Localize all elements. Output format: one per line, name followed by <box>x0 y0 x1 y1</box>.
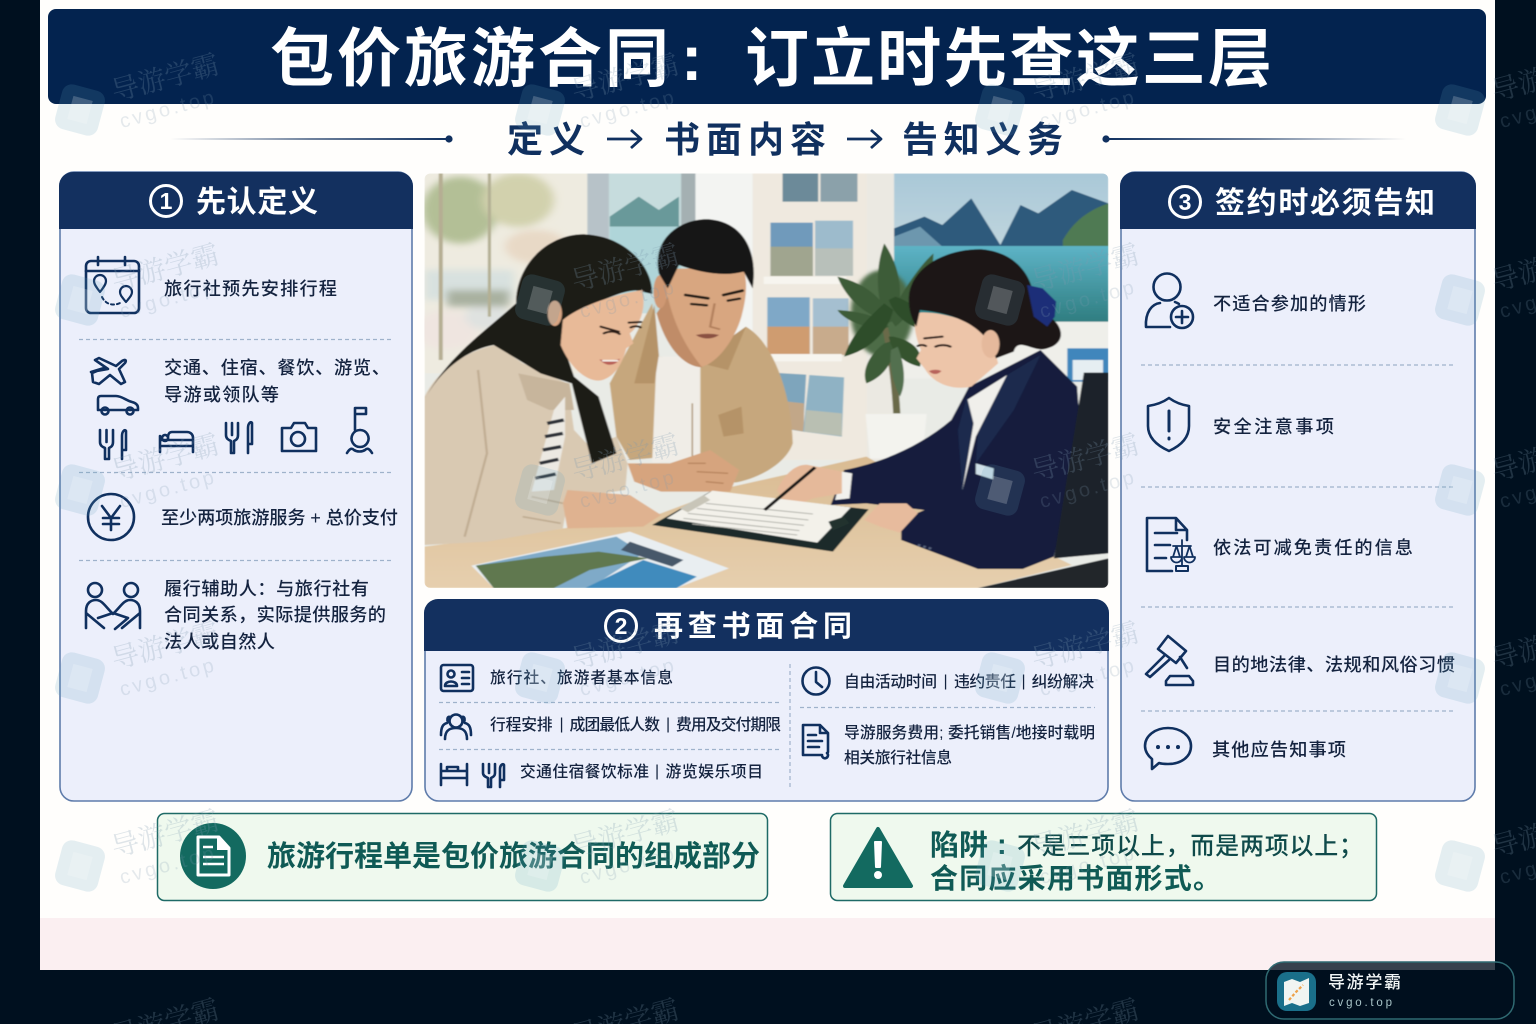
text: fulfilment assistant definition: 合同关系，实际提供服务的 <box>164 605 386 625</box>
clipboard <box>652 492 869 552</box>
text: free time, liability, disputes: 纠纷解决 <box>1032 673 1094 691</box>
watermark pattern: 导游学霸 <box>568 48 682 107</box>
icon: id card <box>441 665 473 691</box>
text: guide fees and commissioned sales: 相关旅行社信息 <box>844 748 952 767</box>
panel: 2 written contract <box>424 599 1109 801</box>
street outside <box>424 173 587 373</box>
watermark pattern: 导游学霸 <box>568 428 682 487</box>
potted plant <box>837 243 933 413</box>
man: hands <box>628 450 739 492</box>
watermark pattern: 导游学霸 <box>568 804 682 863</box>
watermark pattern: cvgo.top <box>1037 86 1139 133</box>
icon: speech bubble <box>1145 728 1191 769</box>
text: itinerary, minimum group size, fees: 成团最低人数 <box>570 716 660 734</box>
text: liability exemption information: 依法可减免责任的信息 <box>1213 538 1413 558</box>
text: free time, liability, disputes: 违约责任 <box>954 673 1016 691</box>
watermark pattern: cvgo.top <box>577 654 679 701</box>
watermark pattern: cvgo.top <box>117 276 219 323</box>
icon: person with plus <box>1146 274 1193 328</box>
watermark pattern: 导游学霸 <box>108 616 222 675</box>
brand badge: cvgo.top <box>1329 997 1392 1009</box>
watermark pattern: cvgo.top <box>1037 466 1139 513</box>
icon: fork and knife 2 <box>226 422 252 453</box>
icon: fork and knife <box>100 430 126 459</box>
heading: 3: 签约时必须告知 <box>1215 187 1435 220</box>
heading: 2: 再查书面合同 <box>654 610 852 643</box>
watermark pattern: cvgo.top <box>577 86 679 133</box>
text: itinerary, minimum group size, fees: | <box>560 716 564 733</box>
title banner: 订立时先查这三层 <box>745 23 1272 95</box>
icon: camera <box>282 423 316 451</box>
table <box>424 457 1072 588</box>
woman: jacket <box>424 345 628 545</box>
woman: hair <box>424 234 652 463</box>
text: free time, liability, disputes: | <box>944 673 948 690</box>
text: fulfilment assistant definition: 法人或自然人 <box>164 631 275 652</box>
watermark pattern: cvgo.top <box>577 276 679 323</box>
watermark pattern: 导游学霸 <box>108 804 222 863</box>
icon: clock <box>802 668 830 694</box>
callout: itinerary is part of contract: 旅游行程单是包价旅游合同的组成部分 <box>267 840 760 873</box>
watermark pattern: cvgo.top <box>117 466 219 513</box>
watermark pattern: 导游学霸 <box>568 238 682 297</box>
watermark pattern: 导游学霸 <box>108 48 222 107</box>
watermark pattern: cvgo.top <box>577 466 679 513</box>
subtitle flow <box>170 119 1406 160</box>
icon: document badge <box>180 823 246 889</box>
clerk: jacket <box>831 350 1081 569</box>
mural right <box>894 174 1108 245</box>
panel: 3 mandatory disclosures <box>1120 172 1476 801</box>
clerk: face <box>915 313 998 388</box>
watermark pattern: 导游学霸 <box>1028 616 1142 675</box>
icon: gavel <box>1146 636 1193 685</box>
woman: hand <box>563 490 661 528</box>
text: guide fees and commissioned sales: 导游服务费用; 委托销售/地接时载明 <box>844 724 1095 742</box>
icon: fork and knife small <box>483 764 504 787</box>
text: arranged itinerary: 旅行社预先安排行程 <box>164 279 337 299</box>
text: itinerary, minimum group size, fees: 行程安排 <box>490 716 553 734</box>
subtitle flow: 定义 <box>507 119 585 160</box>
text: fulfilment assistant definition: 履行辅助人：与旅行社有 <box>164 579 369 599</box>
icon: bed <box>160 432 193 452</box>
text: service types: 交通、住宿、餐饮、游览、 <box>164 358 390 378</box>
icon: car <box>98 396 138 414</box>
icon: warning triangle <box>845 829 911 886</box>
text: two services plus total price: 至少两项旅游服务 + 总价支付 <box>161 508 398 528</box>
brand badge <box>1266 962 1514 1019</box>
text: itinerary, minimum group size, fees <box>490 715 781 734</box>
woman: face <box>561 290 644 381</box>
brochure rack <box>752 174 754 332</box>
icon: shield <box>1148 398 1189 451</box>
watermark pattern: 导游学霸 <box>1028 804 1142 863</box>
text: standards and entertainment: 交通住宿餐饮标准 <box>520 762 649 781</box>
text: standards and entertainment: 游览娱乐项目 <box>666 763 763 781</box>
watermark pattern: cvgo.top <box>1037 842 1139 889</box>
magazine <box>471 532 729 588</box>
heading: 1: 1 <box>160 188 173 214</box>
watermark pattern: cvgo.top <box>1037 654 1139 701</box>
callout: trap warning: : <box>997 829 1007 861</box>
icon: bed small <box>441 764 467 785</box>
text: other matters: 其他应告知事项 <box>1212 739 1346 760</box>
watermark pattern: 导游学霸 <box>568 616 682 675</box>
watermark pattern: 导游学霸 <box>108 428 222 487</box>
title banner: : <box>681 22 702 94</box>
watermark pattern: 导游学霸 <box>108 238 222 297</box>
text: service types: 导游或领队等 <box>164 385 279 405</box>
text: itinerary, minimum group size, fees: | <box>666 716 670 733</box>
text: fulfilment assistant definition <box>164 579 386 652</box>
text: free time, liability, disputes <box>844 673 1094 691</box>
watermark pattern: cvgo.top <box>1037 276 1139 323</box>
watermark pattern: cvgo.top <box>117 842 219 889</box>
heading: 1: 先认定义 <box>196 186 318 219</box>
icon: guide with flag <box>347 408 372 453</box>
text: itinerary, minimum group size, fees: 费用及交付期限 <box>676 715 781 734</box>
watermark pattern: 导游学霸 <box>1028 238 1142 297</box>
watermark pattern: cvgo.top <box>117 86 219 133</box>
subtitle flow: 告知义务 <box>902 119 1063 160</box>
callout: trap warning: 合同应采用书面形式。 <box>930 863 1221 894</box>
text: standards and entertainment <box>520 762 763 781</box>
wall <box>695 173 753 340</box>
title banner: 包价旅游合同 <box>270 23 669 95</box>
text: service types <box>164 358 390 405</box>
callout: itinerary is part of contract <box>158 814 768 900</box>
man: face <box>663 269 746 367</box>
heading: 2: 2 <box>615 613 627 639</box>
text: safety notes: 安全注意事项 <box>1213 416 1334 437</box>
icon: fulfilment assistants handshake <box>86 583 140 629</box>
icon: document small <box>803 725 828 758</box>
text: free time, liability, disputes: 自由活动时间 <box>844 673 937 691</box>
text: destination laws and customs: 目的地法律、法规和风俗习惯 <box>1213 655 1455 675</box>
text: unsuitable conditions: 不适合参加的情形 <box>1213 294 1366 314</box>
callout: trap warning: 陷阱 <box>930 829 988 862</box>
man: shirt <box>610 303 793 483</box>
watermark pattern: 导游学霸 <box>1028 428 1142 487</box>
icon: plane <box>91 358 126 384</box>
icon: itinerary calendar <box>86 257 139 313</box>
heading: 3: 3 <box>1179 189 1191 215</box>
icon: brand map logo <box>1277 972 1316 1011</box>
watermark pattern: cvgo.top <box>117 654 219 701</box>
monitor and keyboard <box>1054 373 1108 558</box>
text: guide fees and commissioned sales <box>844 724 1095 767</box>
photo: couple signing with travel agent <box>424 173 1108 588</box>
watermark pattern: 导游学霸 <box>1028 48 1142 107</box>
text: free time, liability, disputes: | <box>1022 673 1026 690</box>
callout: trap warning <box>830 814 1376 900</box>
text: standards and entertainment: | <box>655 763 659 780</box>
title banner <box>48 9 1486 104</box>
clerk: hands <box>778 464 842 501</box>
watermark pattern: cvgo.top <box>577 842 679 889</box>
icon: yen coin <box>88 494 134 540</box>
panel: 1 definition <box>59 172 413 801</box>
text: basic information: 旅行社、旅游者基本信息 <box>490 668 673 687</box>
window with mural <box>608 174 688 314</box>
brand badge: 导游学霸 <box>1328 972 1401 992</box>
icon: group <box>441 714 471 739</box>
callout: trap warning: 不是三项以上，而是两项以上； <box>1017 833 1363 860</box>
icon: document with scale <box>1147 518 1195 571</box>
subtitle flow: 书面内容 <box>664 119 826 160</box>
